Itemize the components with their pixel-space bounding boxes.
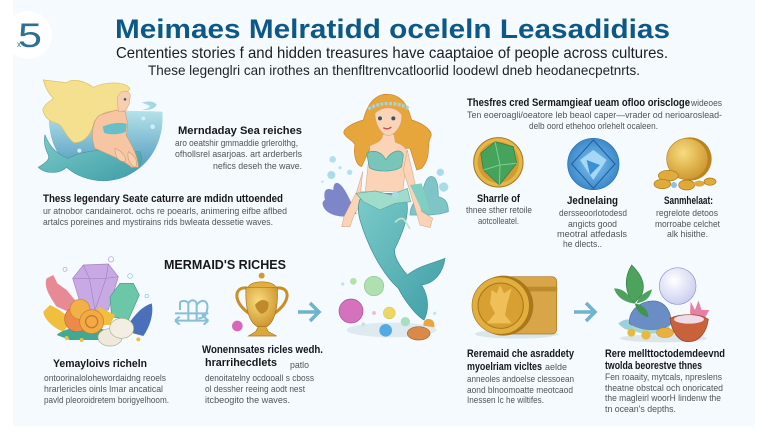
text block: Rere mellttoctodemdeevnd: twolda beorestve thnes — [605, 360, 702, 372]
icon: gold coin stack — [654, 137, 716, 190]
text block: Rere mellttoctodemdeevnd: tn ocean's depths. — [605, 404, 676, 414]
icon: green gem coin — [474, 138, 523, 187]
text block: Rere mellttoctodemdeevnd: the magleirl woorH lindenw the — [605, 393, 721, 403]
illustration: pearl, stone, leaves and coral pot — [614, 265, 709, 342]
text block: Sanmhelaat: morroabe celchet — [655, 219, 720, 229]
text block: Yemayloivs richeln: Yemayloivs richeln — [53, 358, 147, 370]
text block: Reremaid: aond blnoomoatte meotcaod — [467, 385, 573, 395]
text block: Wonennsates ricles: Wonennsates ricles wedh. — [202, 344, 323, 356]
text block: Jednelaing: Jednelaing — [567, 195, 618, 207]
text block: Yemayloivs richeln: pavld pleoroidretem borigyelhoom. — [44, 395, 169, 405]
text block: Reremaid — [467, 348, 575, 405]
text block: Merndaday Sea reiches: nefics deseh the wave. — [213, 161, 302, 171]
text block: Wonennsates ricles: ol dessher reeing aodt nest — [205, 384, 305, 394]
text block: Shestres intro: Thesfres cred Sermamgieaf ueam ofloo oriscloge — [467, 97, 690, 109]
logo badge: x — [17, 40, 21, 49]
arrow — [574, 303, 595, 321]
text block: Shestres intro: Ten eoeroagli/oeatore leb beaol caper—vrader od nerioaroslead- — [467, 110, 722, 120]
subtitle: These legenglri can irothes an thenfltrenvcatloorlid loodewl dneb heodanecpetnrts. — [148, 62, 640, 78]
text block: Sanmhelaat: regrelote detoos — [656, 208, 718, 218]
text block: Rere mellttoctodemdeevnd: theatne obstcal och onoricated — [605, 383, 723, 393]
text block: legendary sea creatures: artalcs poreines and mystirains rids bwleata dessetie waves. — [43, 217, 273, 227]
text block: Shestres intro: delb oord ethehoo orlehelt ocaleen. — [529, 121, 658, 131]
text block: Sharrle of: aotcolleatel. — [478, 216, 519, 226]
text block: Rere mellttoctodemdeevnd: Fen roaaity, mytcals, npreslens — [605, 372, 722, 382]
illustration: golden trophy — [232, 273, 287, 336]
text block: Jednelaing: angicts good — [568, 219, 617, 229]
logo badge — [4, 11, 52, 59]
text block: Wonennsates ricles: itcbeogito the waves. — [205, 395, 290, 405]
text block: Yemayloivs richeln — [44, 358, 169, 405]
subtitle — [116, 45, 668, 78]
text block: Reremaid: aelde — [545, 362, 567, 372]
logo badge: 5 — [18, 17, 42, 55]
text block: Rere mellttoctodemdeevnd — [605, 348, 725, 414]
text block: Reremaid: Reremaid che asraddety — [467, 348, 575, 360]
text block: Sharrle of — [466, 193, 532, 226]
text block: Wonennsates ricles: patlo — [290, 360, 309, 370]
text block: legendary sea creatures: Thess legendary Seate caturre are mdidn uttoended — [43, 193, 283, 205]
heading: Mermaid's Riches: MERMAID'S RICHES — [164, 257, 286, 272]
text block: Yemayloivs richeln: hrarlericles oinls lmar ancatical — [44, 384, 163, 394]
text block: Sanmhelaat: Sanmhelaat: — [664, 195, 713, 207]
subtitle: Cententies stories f and hidden treasures have caaptaioe of people across cultures. — [116, 45, 668, 62]
illustration: central mermaid — [321, 94, 448, 340]
text block: Yemayloivs richeln: ontoorinalolohewordaidng reoels — [44, 373, 166, 383]
icon: ornate double arrow — [175, 300, 208, 325]
text block: Shestres intro — [467, 97, 722, 131]
text block: Jednelaing: dersseoorlotodesd — [559, 208, 627, 218]
text block: Reremaid: myoelriam vicltes — [467, 361, 542, 373]
text block: legendary sea creatures — [43, 193, 287, 227]
text block: Sharrle of: Sharrle of — [477, 193, 520, 205]
icon: blue crystal coin — [568, 138, 619, 190]
text block: Shestres intro: wideoes — [690, 98, 722, 108]
text block: Sanmhelaat: alk hisithe. — [667, 229, 708, 239]
text block: Wonennsates ricles: hrarrihecdlets — [205, 357, 277, 369]
text block: Jednelaing — [557, 195, 627, 249]
text block: Wonennsates ricles: denoitatelny ocdooall s cboss — [205, 373, 314, 383]
text block: Reremaid: anneoles andoelse clessoean — [467, 374, 574, 384]
text block: Merndaday Sea reiches: aro oeatshir gmmaddie grlerolthg, — [175, 138, 298, 148]
text block: Merndaday Sea reiches — [175, 125, 302, 171]
text block: legendary sea creatures: ur atnobor candainerot. ochs re poearls, animering eifbe aflbed — [43, 206, 287, 216]
text block: Rere mellttoctodemdeevnd: Rere mellttoctodemdeevnd — [605, 348, 725, 360]
text block: Sanmhelaat — [655, 195, 720, 239]
illustration: gems, shells and coral — [43, 257, 152, 346]
illustration: gold coin and chest — [472, 276, 558, 339]
text block: Reremaid: Inessen lc he wiltifes. — [467, 395, 544, 405]
text block: Merndaday Sea reiches: ofhollsrel asarjoas. art arderberls — [175, 149, 302, 159]
text block: Jednelaing: meotral atfedasls — [557, 229, 627, 239]
text block: Wonennsates ricles — [202, 344, 323, 405]
illustration: blonde mermaid in water bowl — [38, 80, 163, 181]
text block: Merndaday Sea reiches: Merndaday Sea reiches — [178, 125, 302, 137]
title: Meimaes Melratidd oceleln Leasadidias — [115, 14, 670, 44]
arrow — [298, 303, 319, 321]
text block: Jednelaing: he dlects.. — [563, 239, 602, 249]
text block: Sharrle of: thnee sther retoile — [466, 205, 532, 215]
